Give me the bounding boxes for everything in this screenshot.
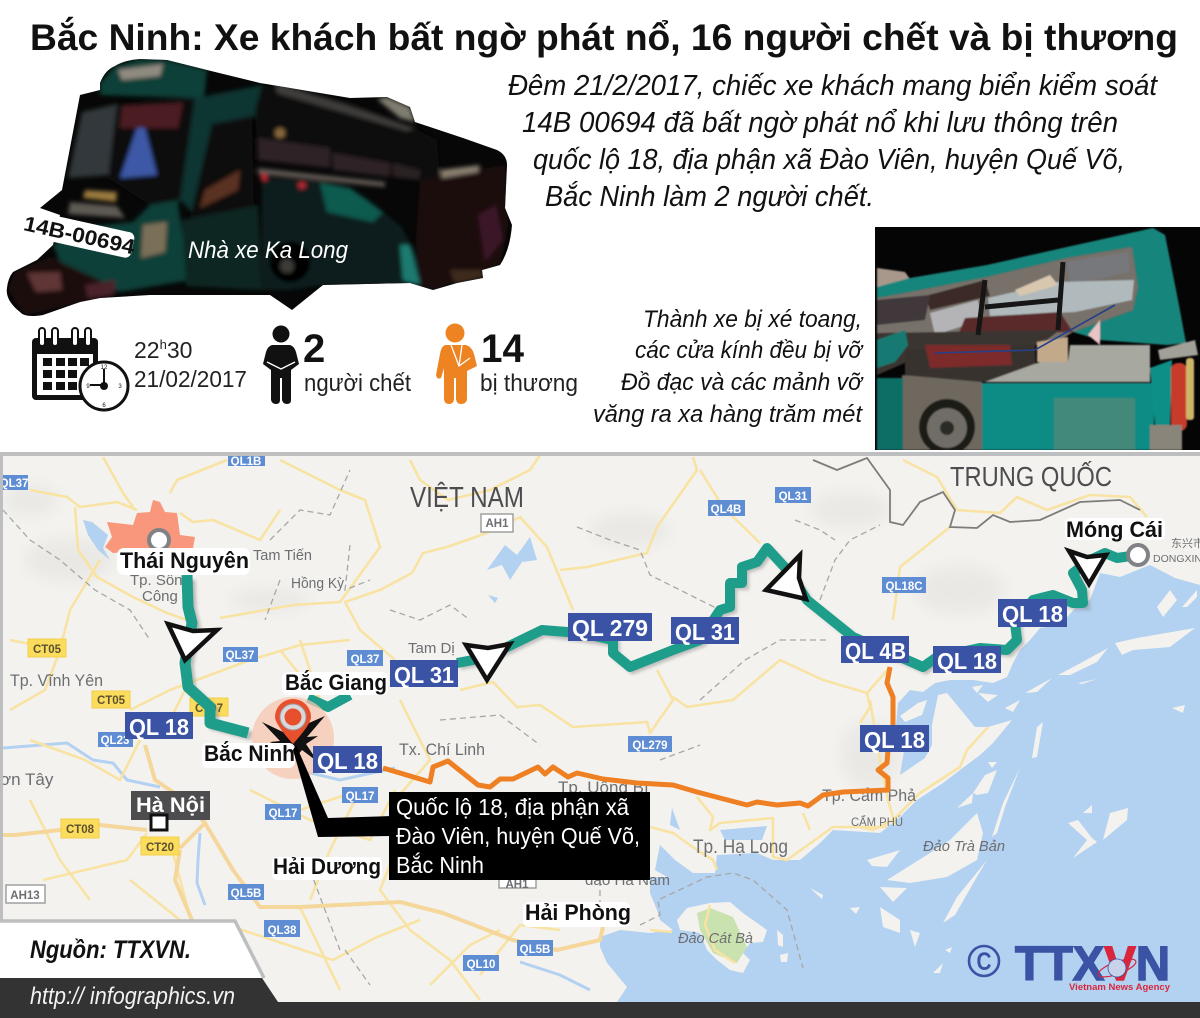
photo caption: Đồ đạc và các mảnh vỡ	[621, 369, 864, 396]
icon: person dead	[263, 326, 299, 404]
licence plate label: 14B-00694	[21, 212, 137, 259]
city labels: Bắc Ninh	[204, 741, 295, 766]
callout: accident location: Đào Viên, huyện Quế Võ,	[396, 823, 640, 849]
small road shields: CT07	[195, 703, 223, 715]
place names on map: Tam Tiến	[253, 547, 312, 564]
city labels: Bắc Giang	[285, 670, 387, 695]
time and date text: h	[160, 337, 167, 352]
direction arrows	[168, 551, 1106, 680]
route number labels: QL 31	[675, 619, 735, 645]
injured count: 14	[481, 327, 525, 371]
city labels: Móng Cái	[1066, 517, 1163, 542]
route number labels: QL 279	[572, 615, 648, 641]
place names on map	[0, 460, 1200, 947]
small road shields: CT05	[33, 644, 62, 656]
icon: calendar and clock: 3	[118, 384, 122, 390]
small road shields: CT05	[97, 695, 126, 707]
footer bar with URL	[0, 978, 1200, 1018]
place names on map: Tp. Uông Bí	[558, 778, 649, 797]
time and date text: 30	[167, 337, 192, 363]
deaths count: người chết	[304, 370, 411, 397]
place names on map: Công	[142, 588, 178, 605]
place names on map: Hồng Kỳ	[291, 575, 344, 592]
small road shields: QL37	[351, 654, 379, 666]
icon: calendar and clock	[32, 328, 128, 410]
route number labels: QL 18	[1002, 601, 1063, 627]
small road shields	[0, 455, 926, 971]
time and date text: 22	[134, 337, 160, 363]
place names on map: Tp. Vĩnh Yên	[10, 671, 103, 690]
bus operator caption: Nhà xe Ka Long	[188, 237, 348, 264]
route number labels: QL 18	[864, 727, 925, 753]
small road shields: QL31	[779, 491, 808, 503]
map land base	[0, 452, 1200, 1018]
damaged bus photo	[875, 227, 1200, 455]
small road shields: QL4B	[711, 504, 741, 516]
photo caption: Thành xe bị xé toang,	[643, 306, 862, 333]
title: Bắc Ninh: Xe khách bất ngờ phát nổ, 16 người chết và bị thương	[30, 16, 1178, 58]
intro text block: Bắc Ninh làm 2 người chết.	[545, 180, 874, 213]
Hà Nội marker: Hà Nội	[136, 794, 205, 817]
icon: calendar and clock: 9	[86, 384, 90, 390]
place names on map: VIỆT NAM	[410, 481, 524, 514]
small road shields: QL18C	[885, 581, 923, 593]
icon: person injured	[436, 324, 477, 404]
route number labels: QL 4B	[845, 638, 906, 664]
route number labels: QL 18	[937, 648, 997, 674]
place names on map: Tx. Chí Linh	[399, 740, 485, 759]
place names on map: Tam Dị	[408, 640, 455, 657]
intro text block: Đêm 21/2/2017, chiếc xe khách mang biển kiểm soát	[508, 70, 1159, 102]
time and date text: 21/02/2017	[134, 366, 247, 392]
source panel	[0, 921, 264, 978]
small road shields: QL17	[346, 791, 374, 803]
place names on map: Tp. Cẩm Phả	[822, 786, 917, 805]
deaths count: 2	[303, 327, 325, 371]
small road shields: QL17	[269, 808, 297, 820]
icon: calendar and clock: 6	[102, 403, 106, 409]
source panel: Nguồn: TTXVN.	[30, 936, 191, 964]
photo caption: văng ra xa hàng trăm mét	[593, 401, 863, 428]
map details: sea, islands, roads, rivers	[2, 455, 1200, 1002]
route: teal Bắc Giang to Móng Cái	[308, 548, 1138, 707]
accident location marker	[252, 697, 334, 779]
place names on map: ơn Tây	[0, 770, 54, 789]
route number labels: QL 18	[129, 714, 189, 740]
callout: accident location	[293, 745, 650, 880]
place names on map: Tp. Hạ Long	[693, 837, 788, 858]
city labels: Hải Dương	[273, 854, 381, 879]
small road shields: QL37	[226, 650, 254, 662]
logo: TTXVN Vietnam News Agency: Vietnam News Agency	[1069, 982, 1171, 993]
Thái Nguyên province shape	[105, 500, 195, 553]
route number labels: QL 31	[394, 662, 454, 688]
injured count: bị thương	[480, 370, 578, 397]
icon: calendar and clock: 12	[101, 365, 108, 371]
small road shields: QL279	[632, 740, 668, 752]
Hà Nội marker	[131, 791, 210, 830]
logo: TTXVN Vietnam News Agency: TTXVN	[1015, 938, 1170, 991]
small road shields: AH1	[505, 879, 529, 891]
top map border	[0, 452, 1200, 456]
callout: accident location: Quốc lộ 18, địa phận xã	[396, 794, 629, 820]
photo caption	[593, 306, 864, 428]
place names on map: Tp. Sông	[130, 572, 191, 589]
city labels: Thái Nguyên	[120, 548, 249, 573]
small road shields: QL23	[101, 735, 129, 747]
route: orange section QL 18	[383, 667, 893, 806]
place names on map: TRUNG QUỐC	[950, 460, 1112, 492]
intro text block: 14B 00694 đã bất ngờ phát nổ khi lưu thông trên	[522, 107, 1118, 139]
bus photo cutout	[0, 55, 520, 320]
time and date text	[134, 337, 247, 392]
place names on map: Đảo Trà Bản	[923, 838, 1005, 855]
route number labels: QL 18	[317, 748, 378, 774]
place names on map: đảo Hà Nam	[585, 872, 670, 889]
intro text block	[508, 70, 1159, 213]
small road shields: AH1	[485, 518, 509, 530]
footer bar with URL: http:// infographics.vn	[30, 983, 235, 1010]
intro text block: quốc lộ 18, địa phận xã Đào Viên, huyện Quế Võ,	[533, 144, 1125, 176]
deaths count	[303, 327, 411, 397]
small road shields: QL38	[268, 925, 297, 937]
map	[0, 452, 1200, 1018]
small road shields: QL37	[0, 478, 28, 490]
injured count	[480, 327, 578, 397]
logo: TTXVN Vietnam News Agency: C	[976, 948, 992, 976]
small road shields: QL5B	[231, 888, 261, 900]
place names on map: Đảo Cát Bà	[678, 930, 753, 947]
route: teal Thái Nguyên to Bắc Ninh	[185, 575, 252, 736]
callout: accident location: Bắc Ninh	[396, 852, 484, 878]
small road shields: AH13	[10, 890, 40, 902]
endpoint markers	[149, 530, 1148, 565]
small road shields: QL5B	[520, 944, 550, 956]
city labels: Hải Phòng	[525, 900, 631, 925]
small road shields: CT20	[146, 842, 174, 854]
small road shields: QL10	[467, 959, 495, 971]
photo caption: các cửa kính đều bị vỡ	[635, 337, 864, 364]
small road shields: CT08	[66, 824, 95, 836]
place names on map: CẨM PHÚ	[851, 814, 903, 829]
route number labels	[125, 599, 1067, 774]
city labels	[117, 517, 1165, 927]
small road shields: QL1B	[231, 456, 261, 468]
